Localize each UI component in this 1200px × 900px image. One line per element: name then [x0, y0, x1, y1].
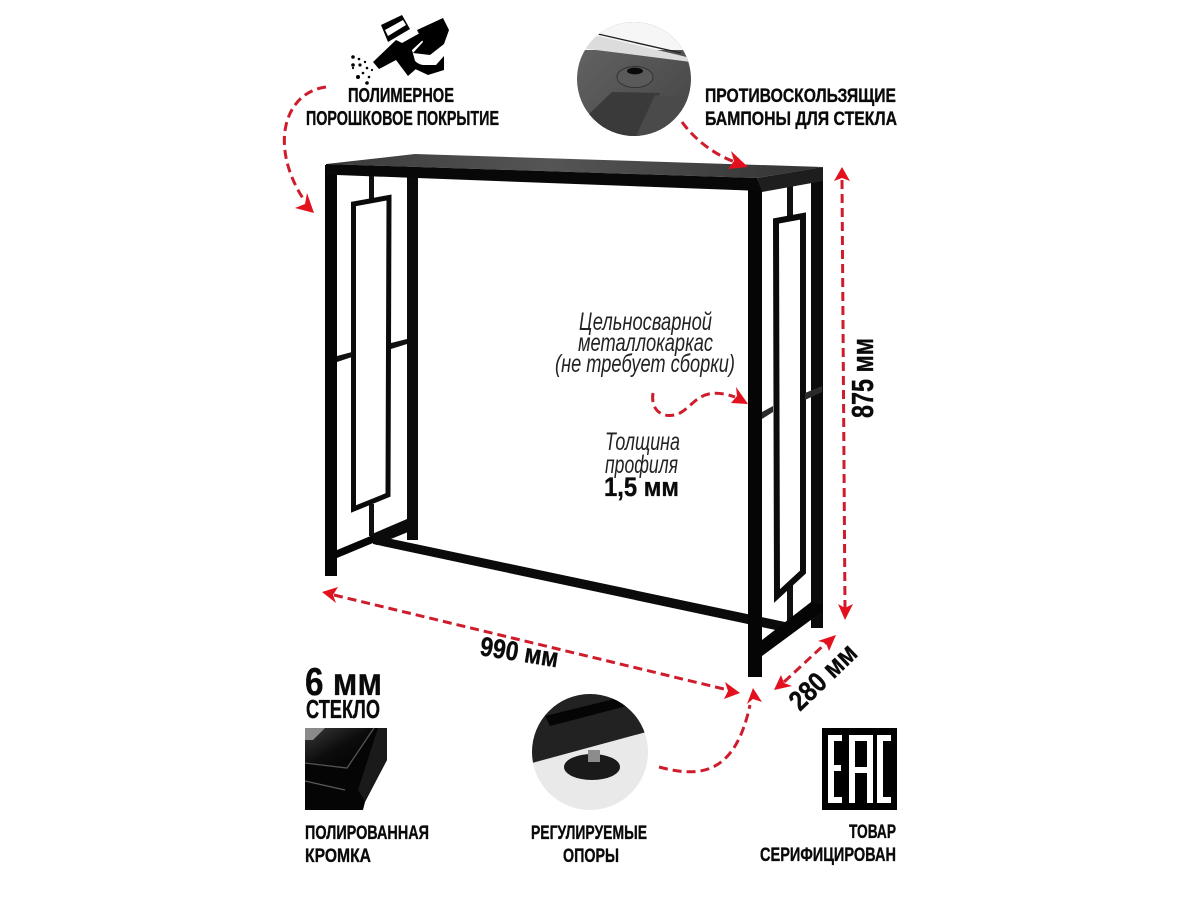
heading: 6 mm glass	[305, 661, 382, 724]
text: profile thickness: Толщина	[605, 428, 680, 456]
heading: bumpers	[705, 85, 897, 130]
photo: anti-slip bumper	[577, 22, 691, 136]
text: profile thickness: профиля	[605, 451, 678, 479]
photo: adjustable foot	[532, 694, 650, 810]
text: welded frame note: Цельносварной	[579, 308, 712, 336]
label: depth 280 mm: 280 мм	[783, 637, 863, 716]
arrow: bumper to top	[682, 122, 748, 169]
text: profile thickness	[604, 428, 680, 502]
top frame rails	[326, 164, 823, 192]
heading: powder coating: ПОРОШКОВОЕ ПОКРЫТИЕ	[306, 108, 499, 130]
label: adjustable feet: РЕГУЛИРУЕМЫЕ	[531, 822, 647, 844]
heading: 6 mm glass: 6 мм	[305, 661, 382, 704]
label: polished edge: ПОЛИРОВАННАЯ	[305, 822, 429, 844]
arrow: width dimension	[322, 587, 740, 699]
label: adjustable feet: ОПОРЫ	[563, 845, 619, 867]
arrow: coating to frame	[284, 87, 326, 213]
left decorative panel	[337, 176, 407, 536]
photo: polished glass edge	[305, 728, 387, 810]
label: certified product: СЕРИФИЦИРОВАН	[760, 844, 896, 866]
arrow: note to frame	[653, 387, 748, 416]
text: welded frame note: металлокаркас	[578, 329, 713, 357]
label: polished edge	[305, 822, 429, 867]
heading: bumpers: БАМПОНЫ ДЛЯ СТЕКЛА	[705, 108, 897, 130]
arrow: depth dimension	[774, 635, 836, 690]
heading: 6 mm glass: СТЕКЛО	[306, 694, 380, 724]
icon: EAC mark	[822, 728, 897, 810]
text: profile thickness: 1,5 мм	[604, 472, 679, 502]
front legs and lower side rails	[325, 165, 823, 677]
heading: powder coating: ПОЛИМЕРНОЕ	[348, 85, 454, 107]
table top glass	[326, 154, 823, 178]
heading: bumpers: ПРОТИВОСКОЛЬЗЯЩИЕ	[705, 85, 896, 107]
label: adjustable feet	[531, 822, 647, 867]
label: height 875 mm: 875 мм	[845, 338, 880, 418]
heading: powder coating	[306, 85, 499, 130]
arrow: foot to leg	[659, 688, 762, 772]
icon: spray gun	[351, 15, 449, 85]
label: width 990 mm: 990 мм	[478, 631, 561, 673]
arrow: height dimension	[834, 167, 853, 620]
label: certified product: ТОВАР	[849, 821, 896, 843]
right decorative panel	[762, 183, 822, 626]
console table	[325, 154, 823, 677]
text: welded frame note: (не требует сборки)	[555, 350, 735, 378]
label: certified product	[760, 821, 896, 866]
back legs and rails	[372, 170, 823, 632]
label: polished edge: КРОМКА	[305, 845, 371, 867]
text: welded frame note	[555, 308, 735, 378]
